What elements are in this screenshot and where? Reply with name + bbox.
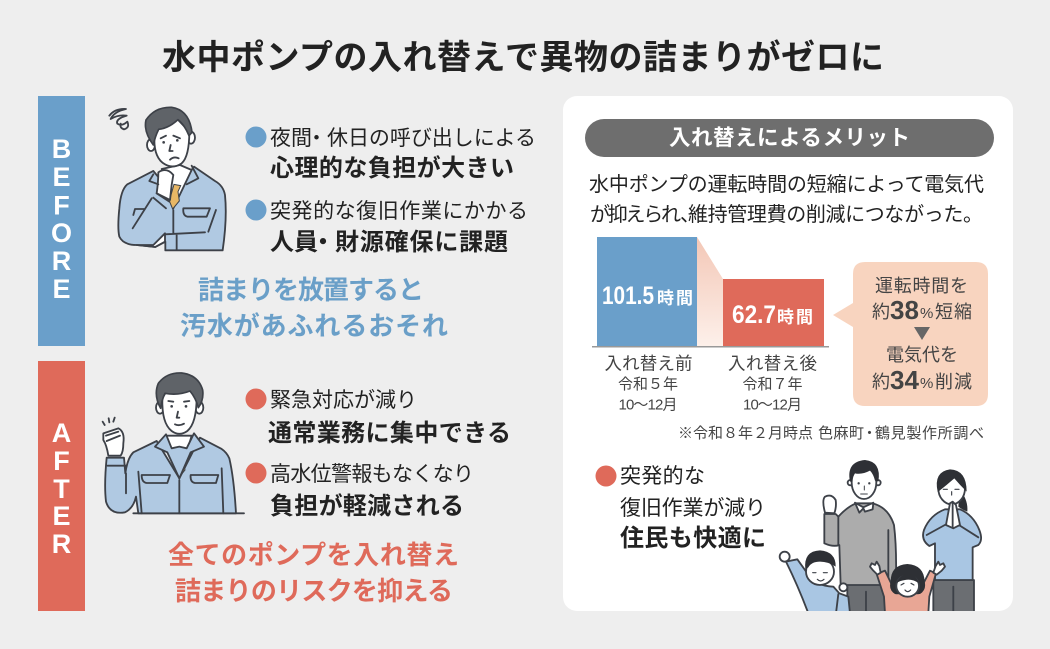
merit heading pill: 入れ替えによるメリット — [669, 126, 910, 150]
source note: 鶴見製作所調べ — [875, 425, 984, 442]
callout: reductions: 38 — [890, 295, 919, 325]
before label bar: B — [52, 134, 71, 164]
axis label: after: 令和７年 — [742, 376, 803, 393]
bullet: sudden repair work: ・ — [311, 229, 335, 256]
bullet: high level alarms gone: 負担が軽減される — [270, 492, 464, 520]
merit description — [589, 173, 984, 226]
boy — [780, 550, 850, 613]
residents benefit text: 復旧作業が減り — [620, 497, 766, 520]
before conclusion: 詰まりを放置すると — [198, 275, 424, 305]
callout: reductions: 約 — [872, 302, 890, 322]
bullet: emergency response reduced — [246, 388, 511, 447]
after label bar: F — [53, 446, 70, 476]
bullet: high level alarms gone: 高水位警報もなくなり — [270, 463, 474, 486]
bar: before 101.5 hours — [597, 237, 697, 346]
before label bar: R — [52, 246, 71, 276]
bullet: emergency response reduced: 緊急対応が減り — [270, 389, 417, 412]
before label bar: O — [51, 218, 72, 248]
bullet: nighttime call-outs: 夜間 — [270, 127, 312, 150]
axis label: before: 入れ替え前 — [604, 354, 692, 374]
axis label: after: 10～12月 — [743, 396, 802, 414]
bullet: sudden repair work: 突発的な復旧作業にかかる — [270, 200, 528, 223]
bar: before 101.5 hours: 時間 — [657, 289, 693, 308]
after label bar: E — [52, 501, 71, 531]
axis label: after: 入れ替え後 — [728, 354, 818, 374]
axis label: before: 令和５年 — [618, 376, 678, 393]
bar: after 62.7 hours: 時間 — [777, 308, 813, 327]
merit description: が抑えられ — [590, 203, 681, 226]
axis label: before — [604, 354, 692, 414]
after conclusion: 全てのポンプを入れ替え — [168, 540, 459, 570]
bullet: sudden repair work — [246, 200, 528, 256]
panel: after — [38, 361, 511, 611]
bullet: high level alarms gone — [246, 462, 474, 520]
source note: 色麻町 — [818, 425, 864, 442]
after label bar: A — [52, 418, 71, 448]
callout: reductions: 34 — [890, 365, 920, 395]
source note — [678, 425, 984, 442]
bar: after 62.7 hours: 62.7 — [732, 301, 776, 329]
residents benefit text: 突発的な — [620, 465, 705, 488]
after conclusion — [168, 540, 459, 606]
before label bar: E — [52, 162, 71, 192]
before conclusion: 汚水があふれるおそれ — [180, 311, 448, 341]
after label bar — [38, 361, 85, 611]
residents benefit text: 住民も快適に — [620, 525, 766, 552]
panel: before — [38, 96, 536, 346]
axis label: before: 10～12月 — [618, 396, 678, 414]
icon: happy family — [780, 460, 981, 613]
callout: reductions: 約 — [872, 372, 890, 392]
bar: before 101.5 hours: 101.5 — [602, 282, 654, 310]
callout: reductions: % — [920, 375, 933, 392]
bullet: nighttime call-outs: 休日の呼び出しによる — [327, 127, 536, 150]
bullet: emergency response reduced: 通常業務に集中できる — [268, 420, 511, 447]
mother — [923, 469, 981, 613]
before label bar: F — [53, 190, 70, 220]
merit description: 維持管理費の削減につながった。 — [688, 203, 983, 226]
bar: after 62.7 hours — [723, 279, 824, 346]
source note: ※令和８年２月時点 — [678, 425, 813, 442]
axis label: after — [728, 354, 818, 414]
callout: reductions: 運転時間を — [875, 276, 968, 296]
icon: worried worker — [109, 107, 226, 250]
bullet: sudden repair work: 人員 — [270, 229, 318, 256]
after label bar: T — [53, 474, 70, 504]
bullet: nighttime call-outs: ・ — [306, 127, 327, 150]
after conclusion: 詰まりのリスクを抑える — [175, 576, 453, 606]
merit description: 水中ポンプの運転時間の短縮によって電気代 — [589, 173, 984, 196]
icon: confident worker — [103, 373, 244, 513]
before label bar — [38, 96, 85, 346]
girl — [870, 562, 945, 613]
bullet: sudden repair work: 財源確保に課題 — [335, 229, 508, 256]
panel: merits — [563, 96, 1013, 613]
father — [823, 460, 896, 613]
callout: reductions — [833, 262, 988, 406]
merit description: 、 — [680, 204, 700, 226]
bar chart: pump running hours — [592, 237, 829, 414]
title: 水中ポンプの入れ替えで異物の詰まりがゼロに — [162, 38, 884, 77]
callout: reductions: 短縮 — [935, 302, 972, 322]
after label bar: R — [52, 529, 71, 559]
before label bar: E — [52, 274, 71, 304]
callout: reductions: 削減 — [935, 372, 972, 392]
bullet: nighttime call-outs — [246, 126, 536, 182]
merit heading pill — [585, 119, 994, 157]
source note: ・ — [862, 425, 877, 442]
callout: reductions: % — [920, 305, 933, 322]
residents benefit text — [596, 465, 766, 552]
before conclusion — [180, 275, 448, 341]
callout: reductions: 電気代を — [886, 345, 958, 365]
bullet: nighttime call-outs: 心理的な負担が大きい — [270, 154, 514, 182]
